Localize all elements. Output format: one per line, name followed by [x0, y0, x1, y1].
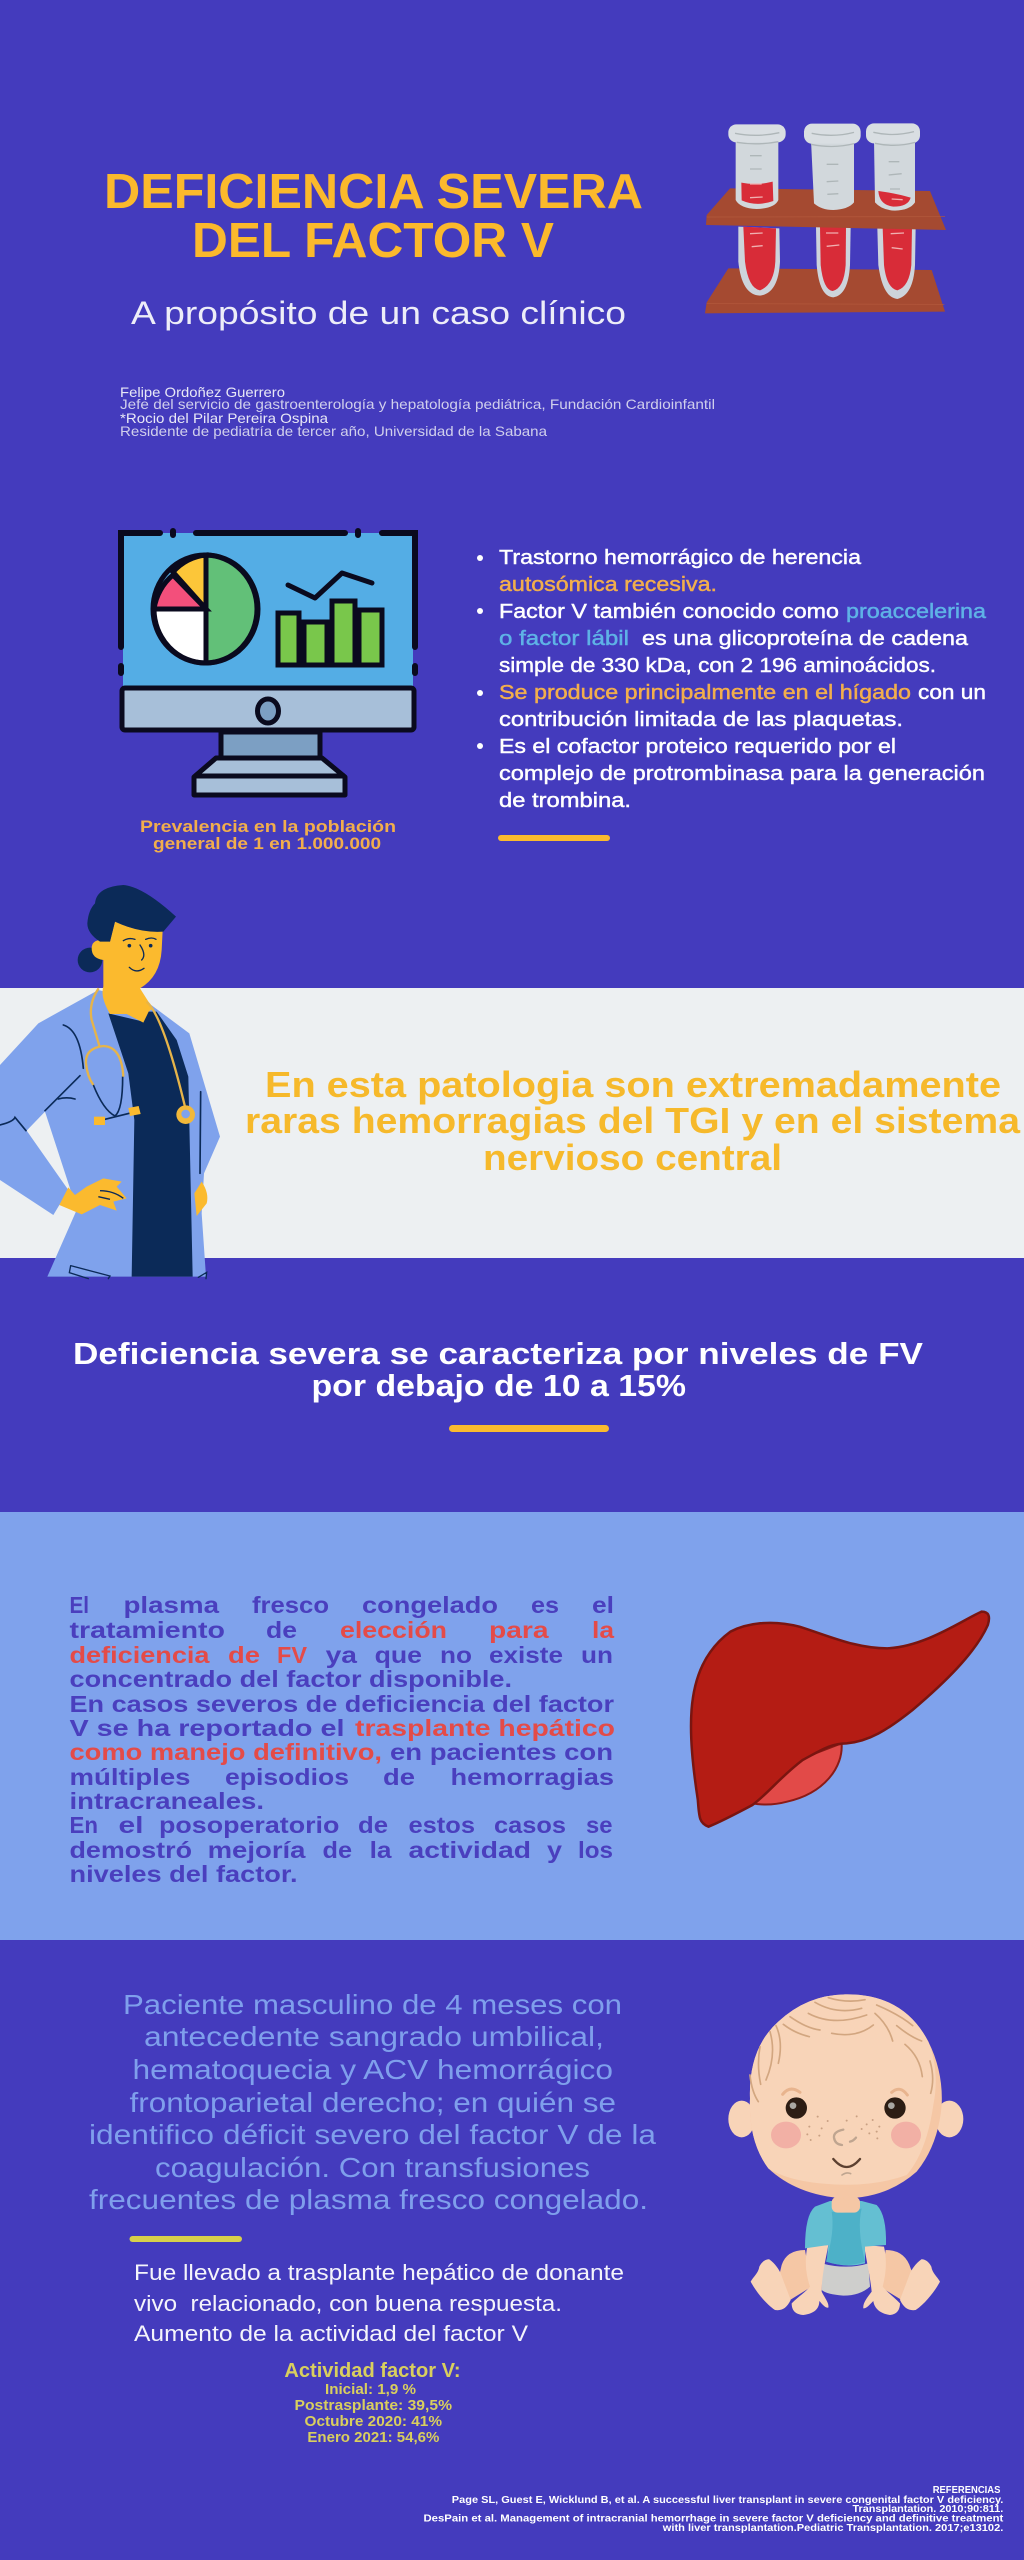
- title: [104, 165, 643, 268]
- treatment text: trasplante hepático: [355, 1715, 615, 1741]
- authors: [120, 384, 715, 439]
- prevalence caption: Prevalencia en la población: [140, 817, 396, 836]
- monitor frame: [121, 531, 415, 673]
- treatment text: posoperatorio: [159, 1812, 339, 1838]
- bullet list: o factor lábil: [499, 627, 629, 650]
- accent bar: [498, 835, 610, 841]
- heading: severe deficiency: Deficiencia severa se caracteriza por niveles de FV: [73, 1336, 923, 1371]
- authors: *Rocio del Pilar Pereira Ospina: [120, 410, 328, 426]
- bullet list: autosómica recesiva.: [499, 573, 717, 596]
- treatment text: V se ha reportado el: [70, 1715, 344, 1741]
- monitor base: [194, 758, 345, 795]
- patient case text: frecuentes de plasma fresco congelado.: [89, 2184, 648, 2215]
- band statement: nervioso central: [483, 1137, 782, 1178]
- authors: Residente de pediatría de tercer año, Universidad de la Sabana: [120, 423, 547, 439]
- treatment text: demostró: [70, 1837, 192, 1863]
- transplant text: vivo relacionado, con buena respuesta.: [134, 2291, 562, 2316]
- treatment text: un: [581, 1642, 613, 1668]
- subtitle: A propósito de un caso clínico: [131, 295, 626, 331]
- bullet list: Factor V también conocido como: [499, 600, 839, 623]
- bullet list: complejo de protrombinasa para la generación: [499, 762, 985, 785]
- treatment text: de: [266, 1617, 297, 1643]
- treatment text: la: [370, 1837, 392, 1863]
- patient case text: frontoparietal derecho; en quién se: [130, 2087, 616, 2118]
- treatment text: actividad: [408, 1837, 531, 1863]
- treatment text: como manejo definitivo,: [70, 1739, 382, 1765]
- title: DEL FACTOR V: [192, 214, 554, 268]
- heading: severe deficiency: por debajo de 10 a 15%: [312, 1368, 686, 1403]
- bullet list: de trombina.: [499, 789, 631, 812]
- authors: Jefe del servicio de gastroenterología y hepatología pediátrica, Fundación Cardioinfantil: [120, 396, 715, 412]
- treatment text: de: [383, 1764, 415, 1790]
- treatment text: mejoría: [208, 1837, 306, 1863]
- treatment text: el: [118, 1812, 144, 1838]
- references: DesPain et al. Management of intracranial hemorrhage in severe factor V deficiency and definitive treatment: [424, 2512, 1004, 2524]
- patient case text: coagulación. Con transfusiones: [155, 2152, 590, 2183]
- panel: light band: [0, 988, 1024, 1258]
- authors: Felipe Ordoñez Guerrero: [120, 384, 285, 400]
- patient case text: [89, 1989, 656, 2215]
- treatment text: concentrado del factor disponible.: [70, 1666, 512, 1692]
- treatment text: episodios: [225, 1764, 349, 1790]
- treatment text: de: [228, 1642, 260, 1668]
- prevalence caption: [140, 817, 396, 853]
- bullet list: [477, 546, 987, 812]
- references: [424, 2484, 1004, 2534]
- accent bar: [449, 1425, 609, 1432]
- illustration: baby: [728, 1994, 963, 2315]
- bullet list: Trastorno hemorrágico de herencia: [499, 546, 862, 569]
- bar chart: [278, 601, 382, 665]
- bullet list: proaccelerina: [846, 600, 987, 623]
- treatment text: deficiencia: [70, 1642, 210, 1668]
- treatment text: existe: [489, 1642, 563, 1668]
- factor activity list: Inicial: 1,9 %: [325, 2381, 416, 2398]
- bullet list: Se produce principalmente en el hígado: [499, 681, 911, 704]
- treatment text: casos: [494, 1812, 566, 1838]
- band statement: raras hemorragias del TGI y en el sistema: [245, 1100, 1021, 1141]
- line chart: [288, 573, 372, 598]
- transplant text: Aumento de la actividad del factor V: [134, 2321, 528, 2346]
- panel: treatment band: [0, 1512, 1024, 1940]
- treatment text: estos: [408, 1812, 475, 1838]
- bullet list: es una glicoproteína de cadena: [642, 627, 969, 650]
- monitor button: [258, 699, 278, 723]
- treatment text: En casos severos de deficiencia del factor: [70, 1691, 614, 1717]
- patient case text: antecedente sangrado umbilical,: [144, 2021, 604, 2052]
- treatment text: tratamiento: [70, 1617, 225, 1643]
- pie chart: [153, 555, 258, 663]
- treatment text: El: [70, 1592, 89, 1618]
- factor activity list: Enero 2021: 54,6%: [307, 2429, 439, 2446]
- treatment text: hemorragias: [450, 1764, 614, 1790]
- treatment text: es: [531, 1592, 559, 1618]
- icon: test tubes in rack: [705, 123, 946, 313]
- treatment text: el: [592, 1592, 614, 1618]
- treatment text: de: [358, 1812, 388, 1838]
- treatment text: [70, 1592, 615, 1887]
- icon: liver: [691, 1612, 989, 1827]
- references: REFERENCIAS: [933, 2484, 1000, 2496]
- factor activity list: [284, 2360, 461, 2446]
- treatment text: congelado: [362, 1592, 498, 1618]
- title: DEFICIENCIA SEVERA: [104, 165, 643, 219]
- patient case text: hematoquecia y ACV hemorrágico: [132, 2054, 613, 2085]
- treatment text: se: [586, 1812, 612, 1838]
- references: with liver transplantation.Pediatric Transplantation. 2017;e13102.: [662, 2522, 1003, 2534]
- patient case text: identifico déficit severo del factor V de la: [89, 2119, 656, 2150]
- treatment text: en pacientes con: [390, 1739, 613, 1765]
- references: Page SL, Guest E, Wicklund B, et al. A successful liver transplant in severe congenital factor V deficiency.: [452, 2494, 1003, 2506]
- monitor lower bezel: [122, 688, 414, 730]
- bullet list: con un: [918, 681, 986, 704]
- treatment text: y: [547, 1837, 562, 1863]
- transplant text: Fue llevado a trasplante hepático de donante: [134, 2260, 624, 2285]
- monitor screen: [123, 533, 413, 688]
- bullet list: simple de 330 kDa, con 2 196 aminoácidos.: [499, 654, 936, 677]
- band statement: [245, 1064, 1021, 1178]
- factor activity list: Octubre 2020: 41%: [304, 2413, 442, 2430]
- factor activity list: Actividad factor V:: [284, 2360, 461, 2382]
- treatment text: intracraneales.: [70, 1788, 264, 1814]
- icon: monitor with charts: [121, 531, 415, 795]
- treatment text: plasma: [124, 1592, 219, 1618]
- treatment text: ya: [326, 1642, 357, 1668]
- monitor stand: [221, 732, 320, 758]
- treatment text: que: [375, 1642, 422, 1668]
- treatment text: los: [578, 1837, 613, 1863]
- transplant text: [134, 2260, 624, 2346]
- treatment text: de: [322, 1837, 352, 1863]
- treatment text: elección: [340, 1617, 447, 1643]
- treatment text: FV: [277, 1642, 308, 1668]
- heading: severe deficiency: [73, 1336, 923, 1403]
- factor activity list: Postrasplante: 39,5%: [294, 2397, 452, 2414]
- bullet list: contribución limitada de las plaquetas.: [499, 708, 903, 731]
- treatment text: niveles del factor.: [70, 1861, 298, 1887]
- accent bar: [130, 2236, 242, 2242]
- treatment text: la: [592, 1617, 614, 1643]
- treatment text: para: [489, 1617, 549, 1643]
- illustration: doctor: [0, 885, 220, 1279]
- treatment text: En: [70, 1812, 98, 1838]
- treatment text: fresco: [252, 1592, 329, 1618]
- references: Transplantation. 2010;90:811.: [852, 2503, 1003, 2515]
- treatment text: no: [440, 1642, 472, 1668]
- bullet list: Es el cofactor proteico requerido por el: [499, 735, 896, 758]
- patient case text: Paciente masculino de 4 meses con: [123, 1989, 622, 2020]
- treatment text: múltiples: [70, 1764, 190, 1790]
- prevalence caption: general de 1 en 1.000.000: [153, 834, 381, 853]
- band statement: En esta patologia son extremadamente: [265, 1064, 1001, 1105]
